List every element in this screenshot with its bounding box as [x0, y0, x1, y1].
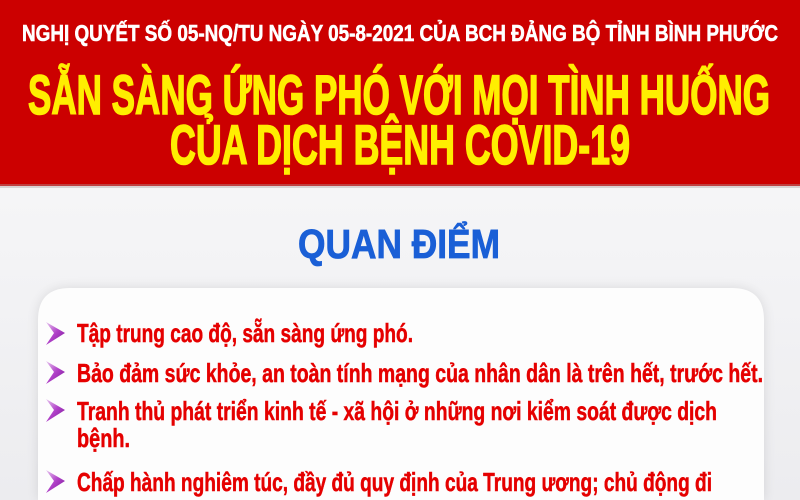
bullet 1: Tập trung cao độ, sẵn sàng ứng phó.	[77, 318, 413, 348]
header band	[0, 0, 800, 188]
bullet 3: bệnh.	[77, 423, 130, 453]
bullet 1	[46, 318, 413, 348]
bullet 3	[46, 396, 717, 453]
section heading: QUAN ĐIỂM	[298, 220, 500, 267]
panel: quan diem card	[38, 288, 764, 500]
